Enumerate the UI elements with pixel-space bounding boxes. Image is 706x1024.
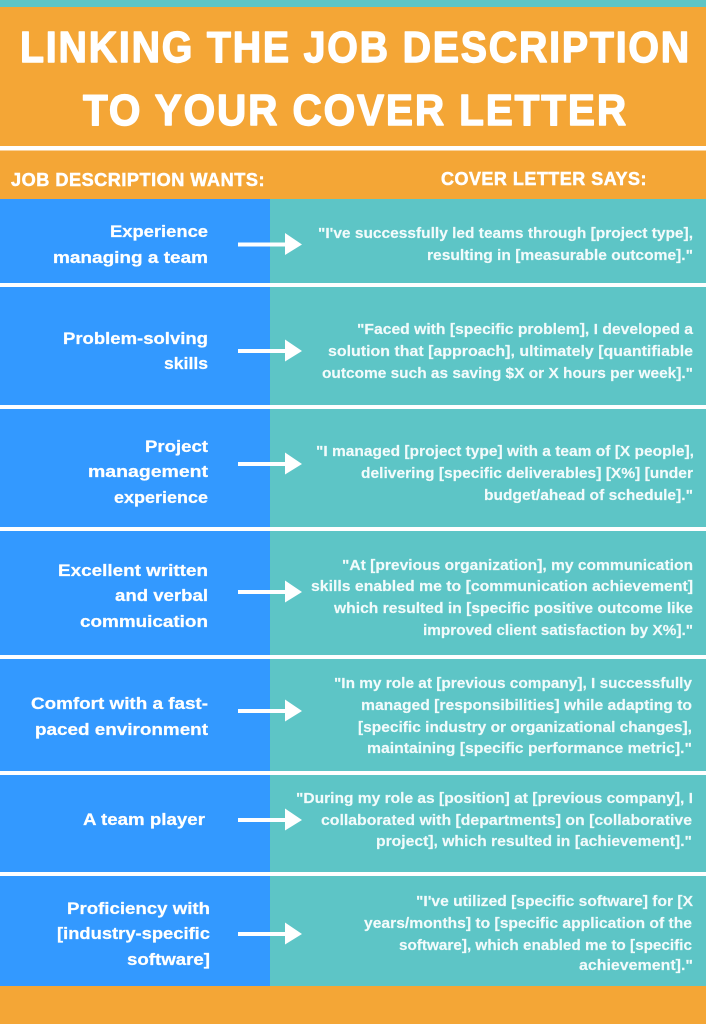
arrow 3 <box>238 452 302 474</box>
panel: cover letter phrase 5 <box>270 659 706 771</box>
panel: cover letter phrase 3: delivering [specific deliverables] [X%] [under <box>361 466 693 482</box>
panel: cover letter phrase 1: resulting in [measurable outcome]." <box>427 248 693 264</box>
panel: cover letter phrase 7: "I've utilized [specific software] for [X <box>416 894 693 910</box>
row 7: software proficiency <box>0 876 706 986</box>
arrow 5 <box>238 700 302 722</box>
panel: cover letter phrase 5: maintaining [specific performance metric]." <box>367 741 692 757</box>
panel: cover letter phrase 7: achievement]." <box>579 958 693 974</box>
panel: requirement 7: software] <box>127 951 210 969</box>
panel: cover letter phrase 1 <box>270 199 706 283</box>
panel: requirement 5 <box>0 659 270 771</box>
panel: cover letter phrase 3 <box>270 409 706 527</box>
panel: requirement 1 <box>0 199 270 283</box>
heading: cover letter says: COVER LETTER SAYS: <box>441 169 647 189</box>
panel: cover letter phrase 5: "In my role at [previous company], I successfully <box>334 676 692 692</box>
panel: cover letter phrase 2: solution that [approach], ultimately [quantifiable <box>328 344 693 360</box>
row 1: managing a team <box>0 199 706 283</box>
row 5: fast-paced environment <box>0 659 706 771</box>
top teal strip <box>0 0 706 7</box>
panel: requirement 3: management <box>88 463 209 481</box>
panel: requirement 4: and verbal <box>115 587 208 605</box>
panel: requirement 7 <box>0 876 270 986</box>
panel: requirement 6 <box>0 775 270 872</box>
panel: requirement 1: Experience <box>110 223 208 241</box>
panel: cover letter phrase 7 <box>270 876 706 986</box>
row 4: communication <box>0 531 706 655</box>
panel: cover letter phrase 6: project], which resulted in [achievement]." <box>376 834 692 850</box>
panel: requirement 3: Project <box>145 438 209 456</box>
panel: requirement 3: experience <box>114 489 208 507</box>
row 3: project management <box>0 409 706 527</box>
arrow 7 <box>238 922 302 944</box>
panel: cover letter phrase 4: skills enabled me to [communication achievement] <box>311 579 693 595</box>
panel: cover letter phrase 5: [specific industry or organizational changes], <box>358 720 692 736</box>
panel: cover letter phrase 6 <box>270 775 706 872</box>
panel: cover letter phrase 4: improved client satisfaction by X%]." <box>423 623 693 639</box>
panel: cover letter phrase 6: "During my role as [position] at [previous company], I <box>296 791 693 807</box>
arrow 4 <box>238 580 302 602</box>
panel: requirement 1: managing a team <box>53 249 208 267</box>
panel: cover letter phrase 6: collaborated with [departments] on [collaborative <box>321 813 692 829</box>
title <box>20 23 691 135</box>
panel: requirement 2: Problem-solving <box>63 330 208 348</box>
panel: requirement 5: paced environment <box>35 721 209 739</box>
panel: cover letter phrase 4: "At [previous organization], my communication <box>342 558 693 574</box>
panel: requirement 7: [industry-specific <box>57 925 210 943</box>
panel: requirement 6: A team player <box>83 811 206 829</box>
title: TO YOUR COVER LETTER <box>83 86 628 135</box>
panel: requirement 7: Proficiency with <box>67 900 210 918</box>
panel: cover letter phrase 7: software], which enabled me to [specific <box>399 938 692 954</box>
panel: cover letter phrase 4 <box>270 531 706 655</box>
panel: cover letter phrase 3: budget/ahead of schedule]." <box>484 488 693 504</box>
row 6: team player <box>0 775 706 872</box>
row 2: problem solving <box>0 287 706 405</box>
panel: requirement 5: Comfort with a fast- <box>31 695 208 713</box>
panel: cover letter phrase 5: managed [responsibilities] while adapting to <box>361 698 692 714</box>
arrow 2 <box>238 340 302 362</box>
panel: requirement 4: commuication <box>80 613 208 631</box>
panel: cover letter phrase 2: "Faced with [specific problem], I developed a <box>357 322 694 338</box>
panel: cover letter phrase 2 <box>270 287 706 405</box>
panel: cover letter phrase 3: "I managed [project type] with a team of [X people], <box>316 444 694 460</box>
panel: cover letter phrase 7: years/months] to [specific application of the <box>364 916 692 932</box>
column headings <box>11 169 647 190</box>
panel: requirement 3 <box>0 409 270 527</box>
arrow 6 <box>238 808 302 830</box>
panel: requirement 4 <box>0 531 270 655</box>
arrow 1 <box>238 233 302 255</box>
panel: requirement 2 <box>0 287 270 405</box>
panel: requirement 2: skills <box>164 355 208 373</box>
panel: cover letter phrase 2: outcome such as saving $X or X hours per week]." <box>322 366 693 382</box>
panel: requirement 4: Excellent written <box>58 562 208 580</box>
panel: cover letter phrase 4: which resulted in [specific positive outcome like <box>333 601 693 617</box>
panel: cover letter phrase 1: "I've successfully led teams through [project type], <box>318 226 693 242</box>
heading: job description wants: JOB DESCRIPTION WANTS: <box>11 170 265 190</box>
